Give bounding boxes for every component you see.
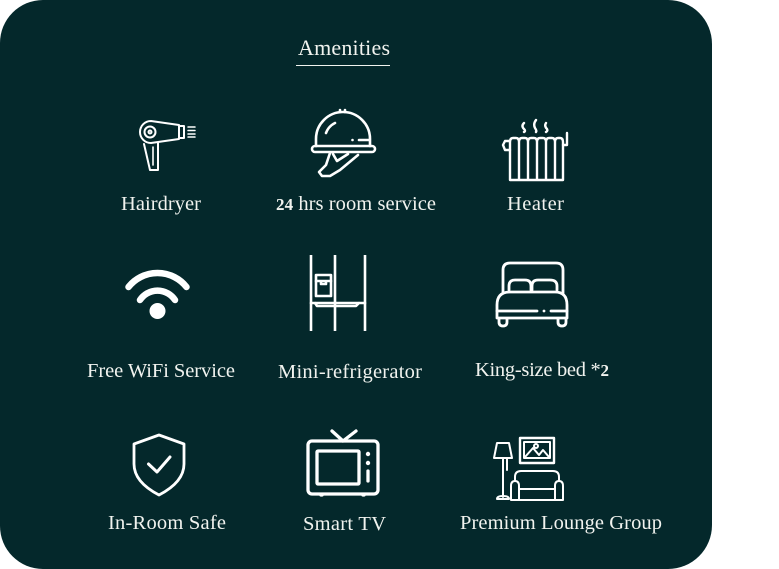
label: King-size bed *2: King-size bed *2 [475, 359, 609, 381]
label: 24 hrs room service: 24 hrs room service [276, 193, 436, 215]
icon: wifi [128, 273, 186, 319]
amenity: mini-refrigerator [278, 255, 422, 383]
amenity: room service [276, 110, 436, 215]
icon: radiator with steam [503, 120, 567, 180]
label: Mini-refrigerator: Mini-refrigerator [278, 361, 422, 383]
icon: television [308, 431, 378, 495]
icon: shield with check [134, 435, 184, 495]
heading: Amenities: Amenities [298, 35, 390, 60]
label: Smart TV: Smart TV [303, 513, 386, 535]
amenity: hairdryer [121, 121, 201, 215]
amenity: smart tv [303, 431, 386, 535]
amenity: premium lounge group [460, 438, 662, 534]
label: Premium Lounge Group: Premium Lounge Group [460, 512, 662, 534]
label: Heater: Heater [507, 193, 564, 215]
amenity: in-room safe [108, 435, 226, 534]
label: In-Room Safe: In-Room Safe [108, 512, 226, 534]
icon: hairdryer [140, 121, 195, 170]
icon: lamp, framed picture and sofa [494, 438, 563, 500]
amenity: heater [503, 120, 567, 215]
amenity: king-size bed [475, 263, 609, 381]
icon: cloche on a hand [312, 110, 375, 176]
label: Hairdryer: Hairdryer [121, 193, 201, 215]
amenity: wifi [87, 273, 235, 382]
icon: bed [497, 263, 567, 326]
icon: refrigerator [311, 255, 365, 331]
label: Free WiFi Service: Free WiFi Service [87, 360, 235, 382]
